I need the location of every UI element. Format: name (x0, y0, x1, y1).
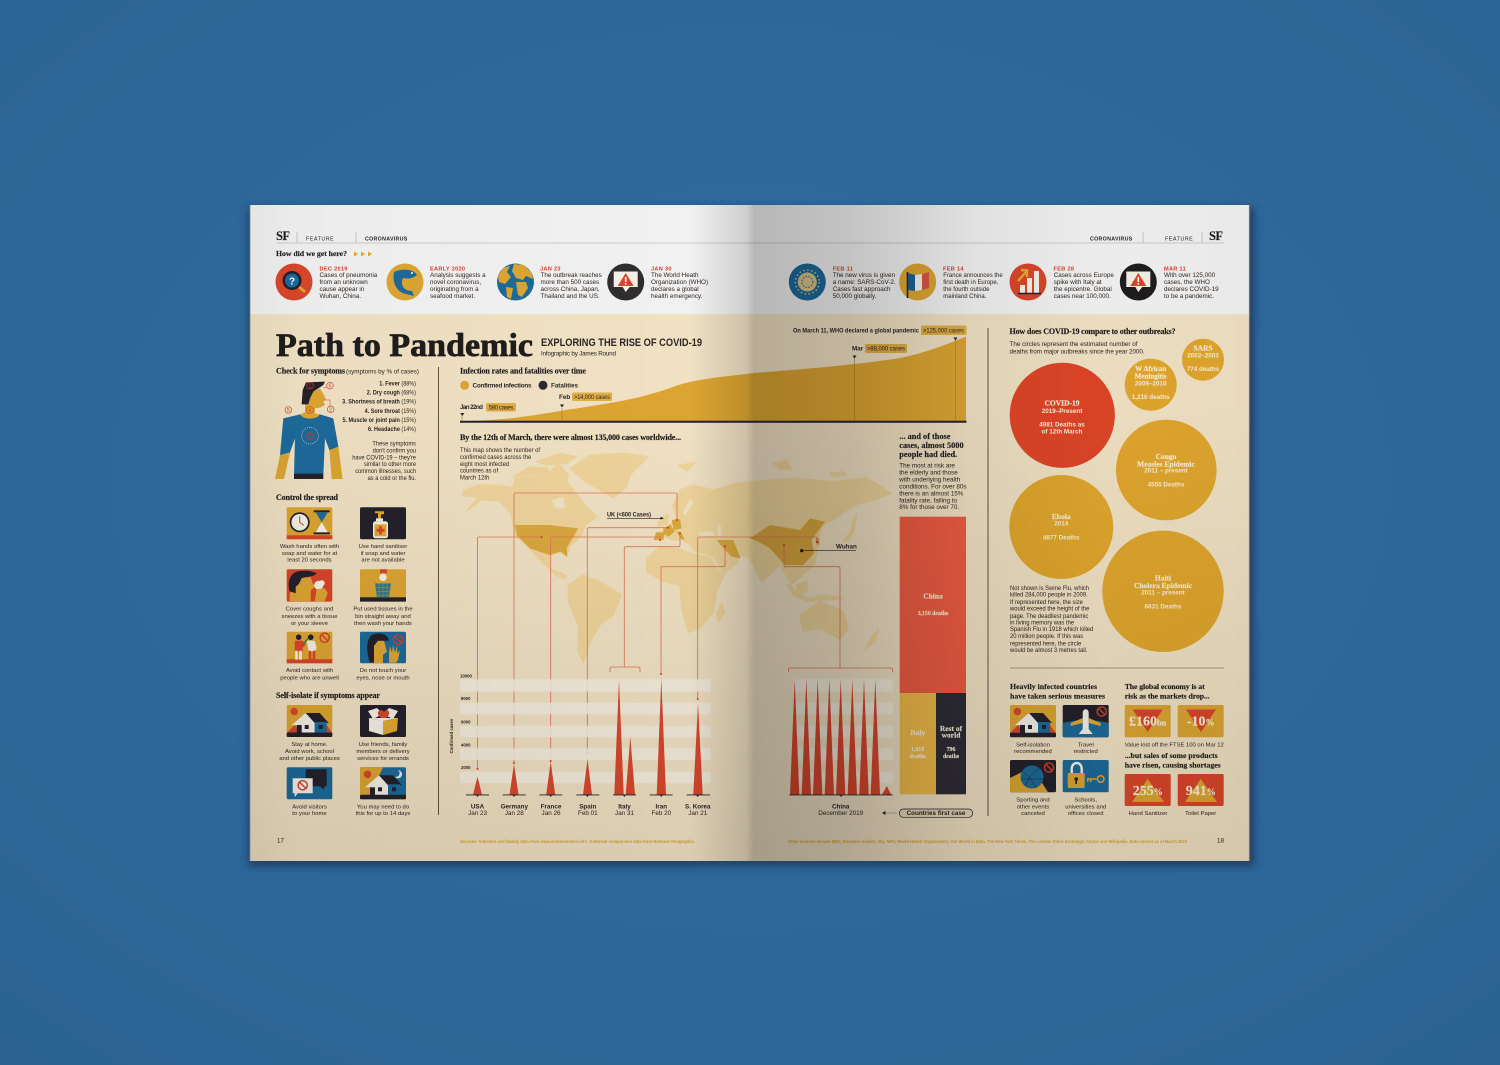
marker: Mar (852, 344, 907, 358)
magazine drop shadow (248, 208, 1254, 866)
spine and page shading (250, 205, 1250, 861)
page number 18: 18 (1217, 838, 1224, 844)
running header: right: FEATURE (1165, 236, 1193, 242)
country labels: Iran (656, 803, 667, 810)
country labels: Italy (618, 803, 631, 810)
panel: serious measures: Sporting and (1016, 798, 1050, 804)
bar segment: rest of world: 796 (947, 747, 955, 753)
circle: Haiti: 6631 Deaths (1145, 604, 1182, 610)
tile: 255%: 255% (1133, 784, 1163, 799)
map note: This map shows the number of (460, 447, 540, 454)
timeline: Dec 2019 (276, 264, 378, 300)
bar segment: rest of world: deaths (943, 754, 960, 760)
bar segment: rest of world: world (942, 730, 961, 740)
panel: deaths: fatality rate, falling to (899, 497, 958, 504)
bar segment: Italy: deaths (910, 754, 926, 760)
panel: deaths: ... and of those (899, 432, 951, 441)
symptom list: 2. Dry cough (68%) (367, 390, 416, 397)
spikes: countries (473, 678, 703, 795)
panel: control the spread: Put used tissues in the (353, 606, 413, 612)
icon: cover coughs (287, 569, 332, 602)
axis labels: 10000 (460, 673, 473, 678)
timeline: Feb 14 (899, 264, 1003, 300)
symptom list: 4. Sore throat (15%) (365, 409, 416, 415)
panel: control the spread: are not available (361, 558, 405, 564)
circle: Congo (1116, 420, 1217, 520)
panel: global economy: Hand Sanitizer (1129, 811, 1167, 817)
panel: deaths: cases, almost 5000 (899, 441, 964, 450)
timeline: Dec 2019: from an unknown (320, 279, 368, 286)
circle: COVID-19: COVID-19 (1044, 398, 1080, 408)
map callout: Wuhan: Wuhan (836, 544, 857, 550)
map heading: By the 12th of March, there were almost 135,000 cases worldwide... (460, 433, 681, 442)
timeline: Jan 30: Organization (WHO) (651, 279, 708, 286)
panel: self-isolate (276, 691, 410, 817)
timeline: Jan 23 (497, 264, 602, 300)
panel: infection rates area chart (460, 326, 966, 422)
figure: body with symptom markers: 3 (309, 434, 312, 440)
bar segment: China: 3,156 deaths (918, 611, 949, 617)
timeline: Early 2020: Analysis suggests a (430, 272, 486, 279)
bar chart: confirmed cases by country (449, 673, 973, 817)
marker: Feb: >14,000 cases (574, 394, 610, 401)
timeline: Feb 11: Cases fast approach (833, 286, 891, 293)
circle: Haiti: Cholera Epidemic (1134, 581, 1193, 590)
panel: control the spread: sneezes with a tissue (282, 614, 338, 620)
baselines (466, 794, 893, 796)
timeline: Jan 23: across China, Japan, (540, 286, 600, 293)
symptom list: 6. Headache (14%) (368, 427, 416, 433)
icon: do not touch face (360, 632, 406, 663)
connector lines from countries to chart (476, 493, 892, 770)
timeline: Feb 28: Cases across Europe (1054, 272, 1114, 279)
timeline: Feb 11: 50,000 globally. (833, 293, 877, 300)
swine flu note: represented here, the circle (1010, 640, 1082, 648)
axis labels: Confirmed cases (449, 718, 454, 753)
chart bands (460, 679, 893, 783)
timeline: Feb 14: France announces the (943, 272, 1003, 279)
panel: self-isolate: services for errands (357, 756, 409, 762)
legend: Fatalities (551, 382, 578, 389)
figure: body with symptom markers (275, 382, 343, 479)
panel: check for symptoms (275, 366, 419, 482)
panel: deaths: conditions. For over 80s (899, 484, 967, 491)
panel: serious measures (1010, 682, 1109, 817)
country labels: USA (471, 803, 485, 810)
panel: control the spread: people who are unwell (280, 676, 339, 682)
running header: left: CORONAVIRUS (365, 236, 408, 242)
circle: Ebola: 4877 Deaths (1043, 534, 1080, 542)
icon: delivery box (360, 705, 406, 737)
figure: body with symptom markers: 4 (309, 408, 312, 414)
country labels (468, 803, 864, 817)
symptom note: as a cold or the flu. (368, 476, 416, 482)
column divider left (438, 367, 440, 815)
timeline heading: How did we get here? (276, 249, 347, 258)
axis labels: 2000 (461, 765, 471, 770)
panel: global economy: ...but sales of some products (1125, 751, 1218, 760)
swine flu note: killed 284,000 people in 2009. (1010, 591, 1088, 599)
timeline: Feb 28: cases near 100,000. (1054, 293, 1111, 300)
country labels: Jan 31 (615, 810, 634, 817)
circle: Congo: Congo (1156, 452, 1177, 461)
map callout: UK: UK (<600 Cases) (607, 512, 651, 518)
panel: self-isolate: Avoid work, school (285, 749, 334, 755)
country labels: China (832, 803, 850, 810)
circle: Congo: 4555 Deaths (1148, 482, 1185, 489)
figure: body with symptom markers: 6 (329, 384, 332, 390)
running header: left (276, 229, 1224, 243)
timeline: Jan 30 (607, 264, 708, 300)
panel: global economy: Value lost off the FTSE 100 on Mar 12 (1125, 742, 1224, 748)
swine flu note: If represented here, the size (1010, 599, 1083, 606)
spikes: China (790, 679, 891, 795)
icon: avoid contact (287, 632, 332, 663)
icon: stay at home (287, 705, 332, 737)
bar segment: Italy: 1,016 (911, 747, 924, 753)
map callout: Wuhan (800, 544, 857, 552)
panel: serious measures: other events (1017, 804, 1049, 810)
bar segment: China (900, 517, 966, 693)
timeline: Early 2020: EARLY 2020 (430, 266, 465, 272)
panel: self-isolate: this for up to 14 days (356, 811, 410, 817)
circle: Haiti (1102, 531, 1224, 652)
panel: deaths: there is an almost 15% (899, 491, 964, 498)
axis labels: 6000 (461, 719, 471, 724)
running header: right: SF (1209, 229, 1223, 243)
panel: check for symptoms: (symptoms by % of cases) (346, 368, 419, 376)
timeline: Mar 11: to be a pandemic. (1164, 293, 1214, 300)
panel: control the spread: eyes, nose or mouth (356, 676, 410, 682)
marker: Jan 22 (460, 403, 516, 416)
panel: self-isolate: Self-isolate if symptoms appear (276, 691, 380, 700)
panel: serious measures: canceled (1021, 811, 1045, 817)
byline: Infographic by James Round (541, 350, 616, 358)
page number 17: 17 (277, 838, 284, 844)
timeline: Feb 14: the fourth outside (943, 286, 990, 293)
figure: body with symptom markers: 5 (287, 408, 290, 414)
panel: serious measures: Heavily infected countries (1010, 682, 1097, 691)
timeline: Mar 11: With over 125,000 (1164, 272, 1216, 279)
map note: confirmed cases across the (460, 454, 532, 461)
timeline: Early 2020: originating from a (430, 286, 479, 293)
timeline: Dec 2019: ? (289, 276, 295, 288)
panel: serious measures: Travel (1078, 742, 1094, 748)
icon: used tissues in bin (360, 569, 406, 602)
legend pill: countries first case (882, 809, 973, 817)
timeline: Jan 30: health emergency. (651, 293, 703, 300)
panel: control the spread: Control the spread (276, 493, 338, 502)
circle: Ebola: 2014 (1054, 520, 1069, 528)
icon: home day and night (360, 767, 406, 799)
marker: Feb: Feb (559, 394, 570, 401)
timeline: Jan 30: The World Heath (651, 272, 699, 279)
panel: deaths (898, 432, 967, 794)
timeline: Jan 30: declares a global (651, 286, 699, 293)
swine flu note: Spanish Flu in 1918 which killed (1010, 626, 1093, 633)
panel: serious measures: universities and (1065, 804, 1106, 810)
magazine spread (250, 205, 1250, 861)
panel: serious measures: Self-isolation (1016, 742, 1050, 748)
panel: control the spread: Avoid contact with (286, 668, 333, 674)
circle: W African Meningitis: 1,210 deaths (1132, 394, 1170, 401)
panel: control the spread: Do not touch your (360, 668, 406, 674)
panel: self-isolate: and other public places (279, 756, 340, 762)
circle: Congo: Measles Epidemic (1137, 459, 1196, 468)
panel: global economy (1125, 682, 1224, 817)
tile: £160bn: £160bn (1129, 714, 1167, 730)
swine flu note: would exceed the height of the (1009, 605, 1090, 613)
marker: Jan 22: 580 cases (488, 404, 514, 411)
panel: self-isolate: to your home (292, 811, 327, 817)
circle: W African Meningitis: W African (1135, 365, 1166, 373)
area: confirmed infections (462, 336, 966, 421)
panel: control the spread: Use hand sanitiser (359, 544, 407, 550)
country labels: Spain (579, 803, 597, 810)
figure: body with symptom markers: 2 (329, 407, 332, 413)
panel: check for symptoms: Check for symptoms (276, 366, 345, 376)
running header: right (1090, 229, 1223, 243)
marker: Mar: >88,000 cases (867, 346, 905, 352)
timeline: Mar 11: MAR 11 (1164, 266, 1186, 272)
footer sources: left: Sources: Infection and fatality data from www.worldometers.info. Outbreak comparison data from National Geographic. (460, 839, 695, 844)
symptom list: 3. Shortness of breath (19%) (342, 399, 416, 406)
timeline: Feb 11: FEB 11 (833, 266, 853, 272)
symptom list: 5. Muscle or joint pain (15%) (342, 418, 416, 424)
bar segment: Italy (900, 693, 936, 794)
bar segment: rest of world (936, 693, 966, 794)
panel: self-isolate: You may need to do (357, 804, 410, 810)
panel: control the spread: or your sleeve (291, 621, 329, 627)
icon: avoid visitors (287, 767, 332, 799)
icon: schools closed (1063, 760, 1109, 792)
panel: self-isolate: members or delivery (356, 749, 410, 755)
map note: March 12th (460, 474, 489, 481)
marker: Mar 11 pandemic: On March 11, WHO declared a global pandemic (793, 328, 919, 334)
symptom list: 1. Fever (88%) (379, 381, 416, 388)
country labels: Germany (501, 803, 528, 810)
running header: left: FEATURE (306, 236, 334, 242)
footer sources: right: Other sources include BBC, Business Insider, Sky, NHS, World Health Organization, Our World in Data, The New York Times, The London Stock Exchange, Kantar and Wikipedia. Data correct as of March 2020 (788, 839, 1188, 844)
symptom note: These symptoms (372, 441, 416, 448)
panel: control the spread: soap and water for at (282, 551, 338, 557)
timeline: Jan 23: JAN 23 (540, 266, 561, 272)
circle: W African Meningitis: Meningitis (1135, 372, 1167, 380)
panel: control the spread: if soap and water (361, 551, 405, 557)
column divider right (987, 328, 989, 816)
panel: deaths: The most at risk are (899, 463, 955, 470)
icon: sporting events cancelled (1010, 760, 1056, 792)
country labels: December 2019 (818, 810, 864, 817)
world map (463, 453, 892, 662)
timeline: Jan 23: Thailand and the US. (540, 293, 600, 300)
timeline: Feb 11 (789, 264, 896, 300)
panel: self-isolate: Stay at home. (291, 742, 328, 748)
swine flu note: 20 million people. If this was (1010, 633, 1083, 640)
panel: control the spread: Cover coughs and (286, 606, 333, 612)
symptom note: common illnesses, such (355, 469, 416, 475)
symptom note: don't confirm you (373, 448, 416, 455)
timeline: Dec 2019: Wuhan, China. (320, 293, 361, 300)
timeline: Dec 2019: DEC 2019 (320, 266, 348, 272)
timeline: Feb 14: mainland China. (943, 293, 987, 300)
legend (460, 381, 578, 390)
panel: deaths: people had died. (899, 450, 957, 459)
panel: deaths: the elderly and those (899, 470, 958, 477)
panel: outbreak comparison: deaths from major outbreaks since the year 2000. (1010, 348, 1145, 355)
timeline: Jan 30: JAN 30 (651, 266, 672, 272)
bar segment: Italy: Italy (910, 728, 925, 737)
timeline: Feb 14: first death in Europe, (943, 279, 999, 286)
timeline: Mar 11 (1120, 264, 1219, 300)
running header: left: SF (276, 229, 290, 243)
marker: Mar: Mar (852, 346, 864, 352)
figure: body with symptom markers: 1 (309, 384, 312, 390)
circle: Haiti: 2011 – present (1141, 590, 1186, 596)
circle: SARS (1182, 339, 1224, 381)
timeline: Feb 28 (1010, 264, 1114, 300)
circle: W African Meningitis: 2009–2010 (1135, 380, 1167, 388)
timeline: Dec 2019: cause appear in (320, 286, 365, 293)
panel: deaths: with underlying health (898, 477, 961, 484)
timeline: Feb 28: FEB 28 (1054, 266, 1074, 272)
timeline: Feb 28: the epicentre. Global (1054, 286, 1112, 293)
circle: W African Meningitis (1125, 359, 1177, 411)
country labels: Jan 28 (505, 810, 524, 817)
symptom note: have COVID-19 – they're (352, 455, 417, 461)
circle: Haiti: Haiti (1155, 574, 1171, 582)
tile: 941%: 941% (1186, 784, 1216, 799)
country labels: France (541, 803, 562, 810)
country labels: Feb 01 (578, 810, 598, 817)
timeline: Jan 23: more than 500 cases (540, 279, 599, 286)
country labels: Jan 23 (468, 810, 487, 817)
circle: COVID-19: 4981 Deaths as (1039, 422, 1085, 428)
timeline: Feb 14: FEB 14 (943, 266, 964, 272)
panel: control the spread: Wash hands often with (280, 544, 339, 550)
icon: hand sanitiser (360, 507, 406, 539)
panel: global economy: Toilet Paper (1185, 811, 1216, 817)
timeline: Dec 2019: Cases of pneumonia (320, 272, 378, 279)
axis labels (449, 673, 473, 770)
circle: Ebola (1009, 475, 1113, 579)
map note: countries as of (460, 468, 498, 475)
panel: outbreak comparison: How does COVID-19 compare to other outbreaks? (1010, 327, 1176, 336)
country labels: Feb 20 (651, 810, 672, 817)
timeline: Feb 28: spike with Italy at (1054, 279, 1102, 286)
timeline: Early 2020 (386, 264, 486, 300)
circle: Ebola: Ebola (1052, 512, 1071, 521)
axis labels: 4000 (461, 742, 471, 747)
country labels: Jan 21 (688, 810, 708, 817)
panel: global economy: The global economy is at (1125, 682, 1205, 691)
timeline: Early 2020: seafood market. (430, 293, 475, 300)
legend: Confirmed infections (472, 382, 532, 389)
circle: SARS: 774 deaths (1187, 366, 1220, 373)
subtitle: EXPLORING THE RISE OF COVID-19 (541, 337, 702, 349)
panel: control the spread: then wash your hands (354, 621, 412, 627)
panel: global economy: risk as the markets drop... (1125, 692, 1210, 700)
circle: COVID-19: 2019–Present (1042, 408, 1083, 415)
tile: -10%: -10% (1187, 714, 1215, 730)
panel: serious measures: have taken serious measures (1010, 692, 1105, 700)
panel: global economy: have risen, causing shortages (1125, 760, 1221, 770)
timeline: Feb 11: The new virus is given (833, 272, 895, 279)
country labels: Jan 26 (542, 810, 561, 817)
marker: Jan 22: Jan 22nd (460, 404, 483, 411)
panel: self-isolate: Use friends, family (359, 742, 407, 748)
icon: travel restricted (1063, 705, 1109, 737)
icon: self-isolation (1010, 705, 1056, 737)
panel: white timeline band (250, 205, 1250, 314)
legend pill: countries first case: Countries first case (907, 810, 966, 817)
symptom note: similar to other more (364, 462, 417, 468)
axis labels: 8000 (461, 696, 471, 701)
marker: Mar 11 pandemic: >125,000 cases (923, 328, 964, 334)
panel: serious measures: restricted (1074, 749, 1098, 755)
panel: serious measures: Schools, (1074, 798, 1097, 804)
swine flu note: page. The deadliest pandemic (1010, 613, 1088, 620)
panel: control the spread (276, 493, 413, 682)
timeline: Mar 11: cases, the WHO (1164, 279, 1210, 286)
panel: serious measures: recommended (1014, 749, 1052, 755)
panel: outbreak comparison (1009, 327, 1224, 654)
circle: COVID-19: of 12th March (1042, 428, 1083, 436)
timeline: Jan 23: The outbreak reaches (540, 272, 602, 279)
panel: deaths: 8% for those over 70. (899, 504, 959, 511)
marker: Feb (559, 392, 612, 408)
panel: self-isolate: Avoid visitors (292, 804, 327, 810)
map note: eight most infected (460, 461, 509, 468)
timeline: Feb 11: a name: SARS-CoV-2. (833, 279, 896, 286)
circle: COVID-19 (1010, 363, 1115, 468)
marker: Mar 11 pandemic (793, 326, 966, 340)
bar segment: China: China (923, 592, 943, 600)
timeline: Early 2020: novel coronavirus, (430, 279, 481, 286)
circle: SARS: SARS (1193, 344, 1213, 352)
circle: Congo: 2011 – present (1144, 468, 1189, 475)
seas cut from land (552, 497, 722, 538)
swine flu note: would be almost 3 metres tall. (1009, 647, 1088, 654)
highlighted countries (515, 525, 578, 557)
panel: beige page (250, 205, 1250, 861)
panel: serious measures: offices closed (1068, 811, 1103, 817)
panel: outbreak comparison: The circles represent the estimated number of (1010, 341, 1138, 348)
panel: control the spread: least 20 seconds (287, 558, 332, 564)
country labels: S. Korea (685, 803, 711, 810)
circle: SARS: 2002–2003 (1187, 353, 1219, 360)
swine flu note: in living memory was the (1010, 619, 1075, 627)
timeline: Mar 11: declares COVID-19 (1164, 286, 1219, 293)
panel: control the spread: bin straight away and (355, 614, 411, 620)
icon: wash hands (287, 507, 332, 539)
title: Path to Pandemic (276, 328, 533, 364)
panel: infection rates area chart: Infection rates and fatalities over time (460, 366, 586, 376)
swine flu note: Not shown is Swine Flu, which (1010, 585, 1089, 592)
running header: right: CORONAVIRUS (1090, 236, 1133, 242)
bar segment: rest of world: Rest of (940, 724, 963, 733)
